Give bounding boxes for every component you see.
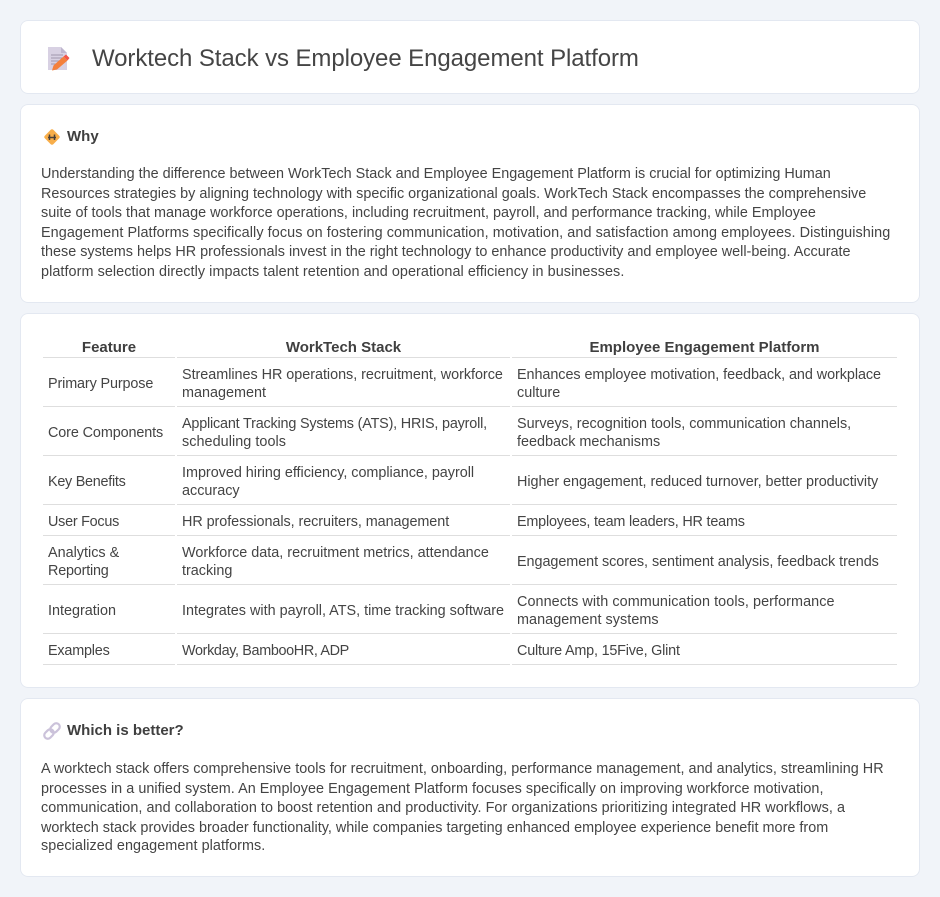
- text block: verdict: processes in a unified system. An Employee Engagement Platform focuses specifically on improving workforce motivation,: [41, 781, 824, 797]
- table row: user focus: Employees, team leaders, HR teams: [517, 514, 745, 530]
- text block: why explanation: [41, 166, 890, 280]
- table row: primary purpose: Streamlines HR operations, recruitment, workforce: [182, 367, 503, 383]
- table row: examples: Culture Amp, 15Five, Glint: [517, 643, 680, 659]
- table row: key benefits: Improved hiring efficiency, compliance, payroll: [182, 465, 474, 481]
- table row: key benefits: [43, 465, 897, 505]
- icon: chain link: [43, 722, 61, 740]
- table row: analytics and reporting: Workforce data, recruitment metrics, attendance: [182, 545, 489, 561]
- text block: verdict: communication, and collaboration to boost retention and productivity. For organizations prioritizing integrated HR workflows, a: [41, 800, 845, 816]
- table row: integration: management systems: [517, 612, 659, 628]
- table row: examples: Workday, BambooHR, ADP: [182, 643, 349, 659]
- text block: why explanation: suite of tools that manage workforce operations, including recruitment, payroll, and performance tracking, while Employee: [41, 205, 816, 221]
- table row: primary purpose: culture: [517, 385, 560, 401]
- panel: comparison table: [20, 313, 920, 688]
- text block: verdict: worktech stack provides broader functionality, while companies targeting enhanced employee experience benefit more from: [41, 820, 828, 836]
- table row: examples: [43, 643, 897, 665]
- table row: integration: Integrates with payroll, ATS, time tracking software: [182, 603, 504, 619]
- text block: why explanation: these systems helps HR professionals invest in the right technology to enhance productivity and employee well-being. Accurate: [41, 244, 851, 260]
- table row: key benefits: Higher engagement, reduced turnover, better productivity: [517, 474, 878, 490]
- table row: analytics and reporting: Analytics &: [48, 545, 119, 561]
- text block: verdict: A worktech stack offers comprehensive tools for recruitment, onboarding, performance management, and analytics, streamlining HR: [41, 761, 884, 777]
- table header: Feature: [82, 339, 136, 356]
- text block: why explanation: platform selection directly impacts talent retention and operational efficiency in businesses.: [41, 264, 624, 280]
- panel: which is better: [20, 698, 920, 877]
- text block: verdict: specialized engagement platforms.: [41, 838, 265, 854]
- table row: core components: feedback mechanisms: [517, 434, 660, 450]
- text block: why explanation: Engagement Platforms specifically focus on fostering communication, motivation, and satisfaction among employees. Distinguishing: [41, 225, 890, 241]
- icon: document with pencil: [48, 47, 70, 70]
- table row: primary purpose: Primary Purpose: [48, 376, 153, 392]
- table row: user focus: [43, 514, 897, 536]
- table row: key benefits: Key Benefits: [48, 474, 126, 490]
- panel: title header: [20, 20, 920, 94]
- text block: why explanation: Understanding the difference between WorkTech Stack and Employee Engagement Platform is crucial for optimizing Human: [41, 166, 831, 182]
- icon: diamond warning sign: [44, 129, 60, 145]
- panel: why: [20, 104, 920, 303]
- table row: analytics and reporting: Engagement scores, sentiment analysis, feedback trends: [517, 554, 879, 570]
- table header: Employee Engagement Platform: [589, 339, 820, 356]
- table row: user focus: User Focus: [48, 514, 119, 530]
- text block: why explanation: Resources strategies by aligning technology with specific organizational goals. WorkTech Stack encompasses the comprehensive: [41, 186, 866, 202]
- table row: analytics and reporting: tracking: [182, 563, 232, 579]
- table row: analytics and reporting: [43, 545, 897, 585]
- table row: analytics and reporting: Reporting: [48, 563, 109, 579]
- title: Worktech Stack vs Employee Engagement Platform: [92, 45, 639, 72]
- text block: verdict: [41, 761, 884, 854]
- table row: core components: Surveys, recognition tools, communication channels,: [517, 416, 851, 432]
- table row: primary purpose: management: [182, 385, 266, 401]
- table row: primary purpose: [43, 367, 897, 407]
- table row: user focus: HR professionals, recruiters, management: [182, 514, 449, 530]
- table row: primary purpose: Enhances employee motivation, feedback, and workplace: [517, 367, 881, 383]
- table header: WorkTech Stack: [286, 339, 401, 356]
- table row: integration: Integration: [48, 603, 116, 619]
- table row: core components: scheduling tools: [182, 434, 286, 450]
- table row: core components: [43, 416, 897, 456]
- table row: key benefits: accuracy: [182, 483, 240, 499]
- table row: integration: [43, 594, 897, 634]
- heading: which is better: Which is better?: [67, 722, 184, 739]
- table row: integration: Connects with communication tools, performance: [517, 594, 835, 610]
- table row: examples: Examples: [48, 643, 110, 659]
- heading: why: Why: [67, 128, 99, 145]
- table row: core components: Applicant Tracking Systems (ATS), HRIS, payroll,: [182, 416, 487, 432]
- table header: [43, 339, 897, 358]
- table row: core components: Core Components: [48, 425, 163, 441]
